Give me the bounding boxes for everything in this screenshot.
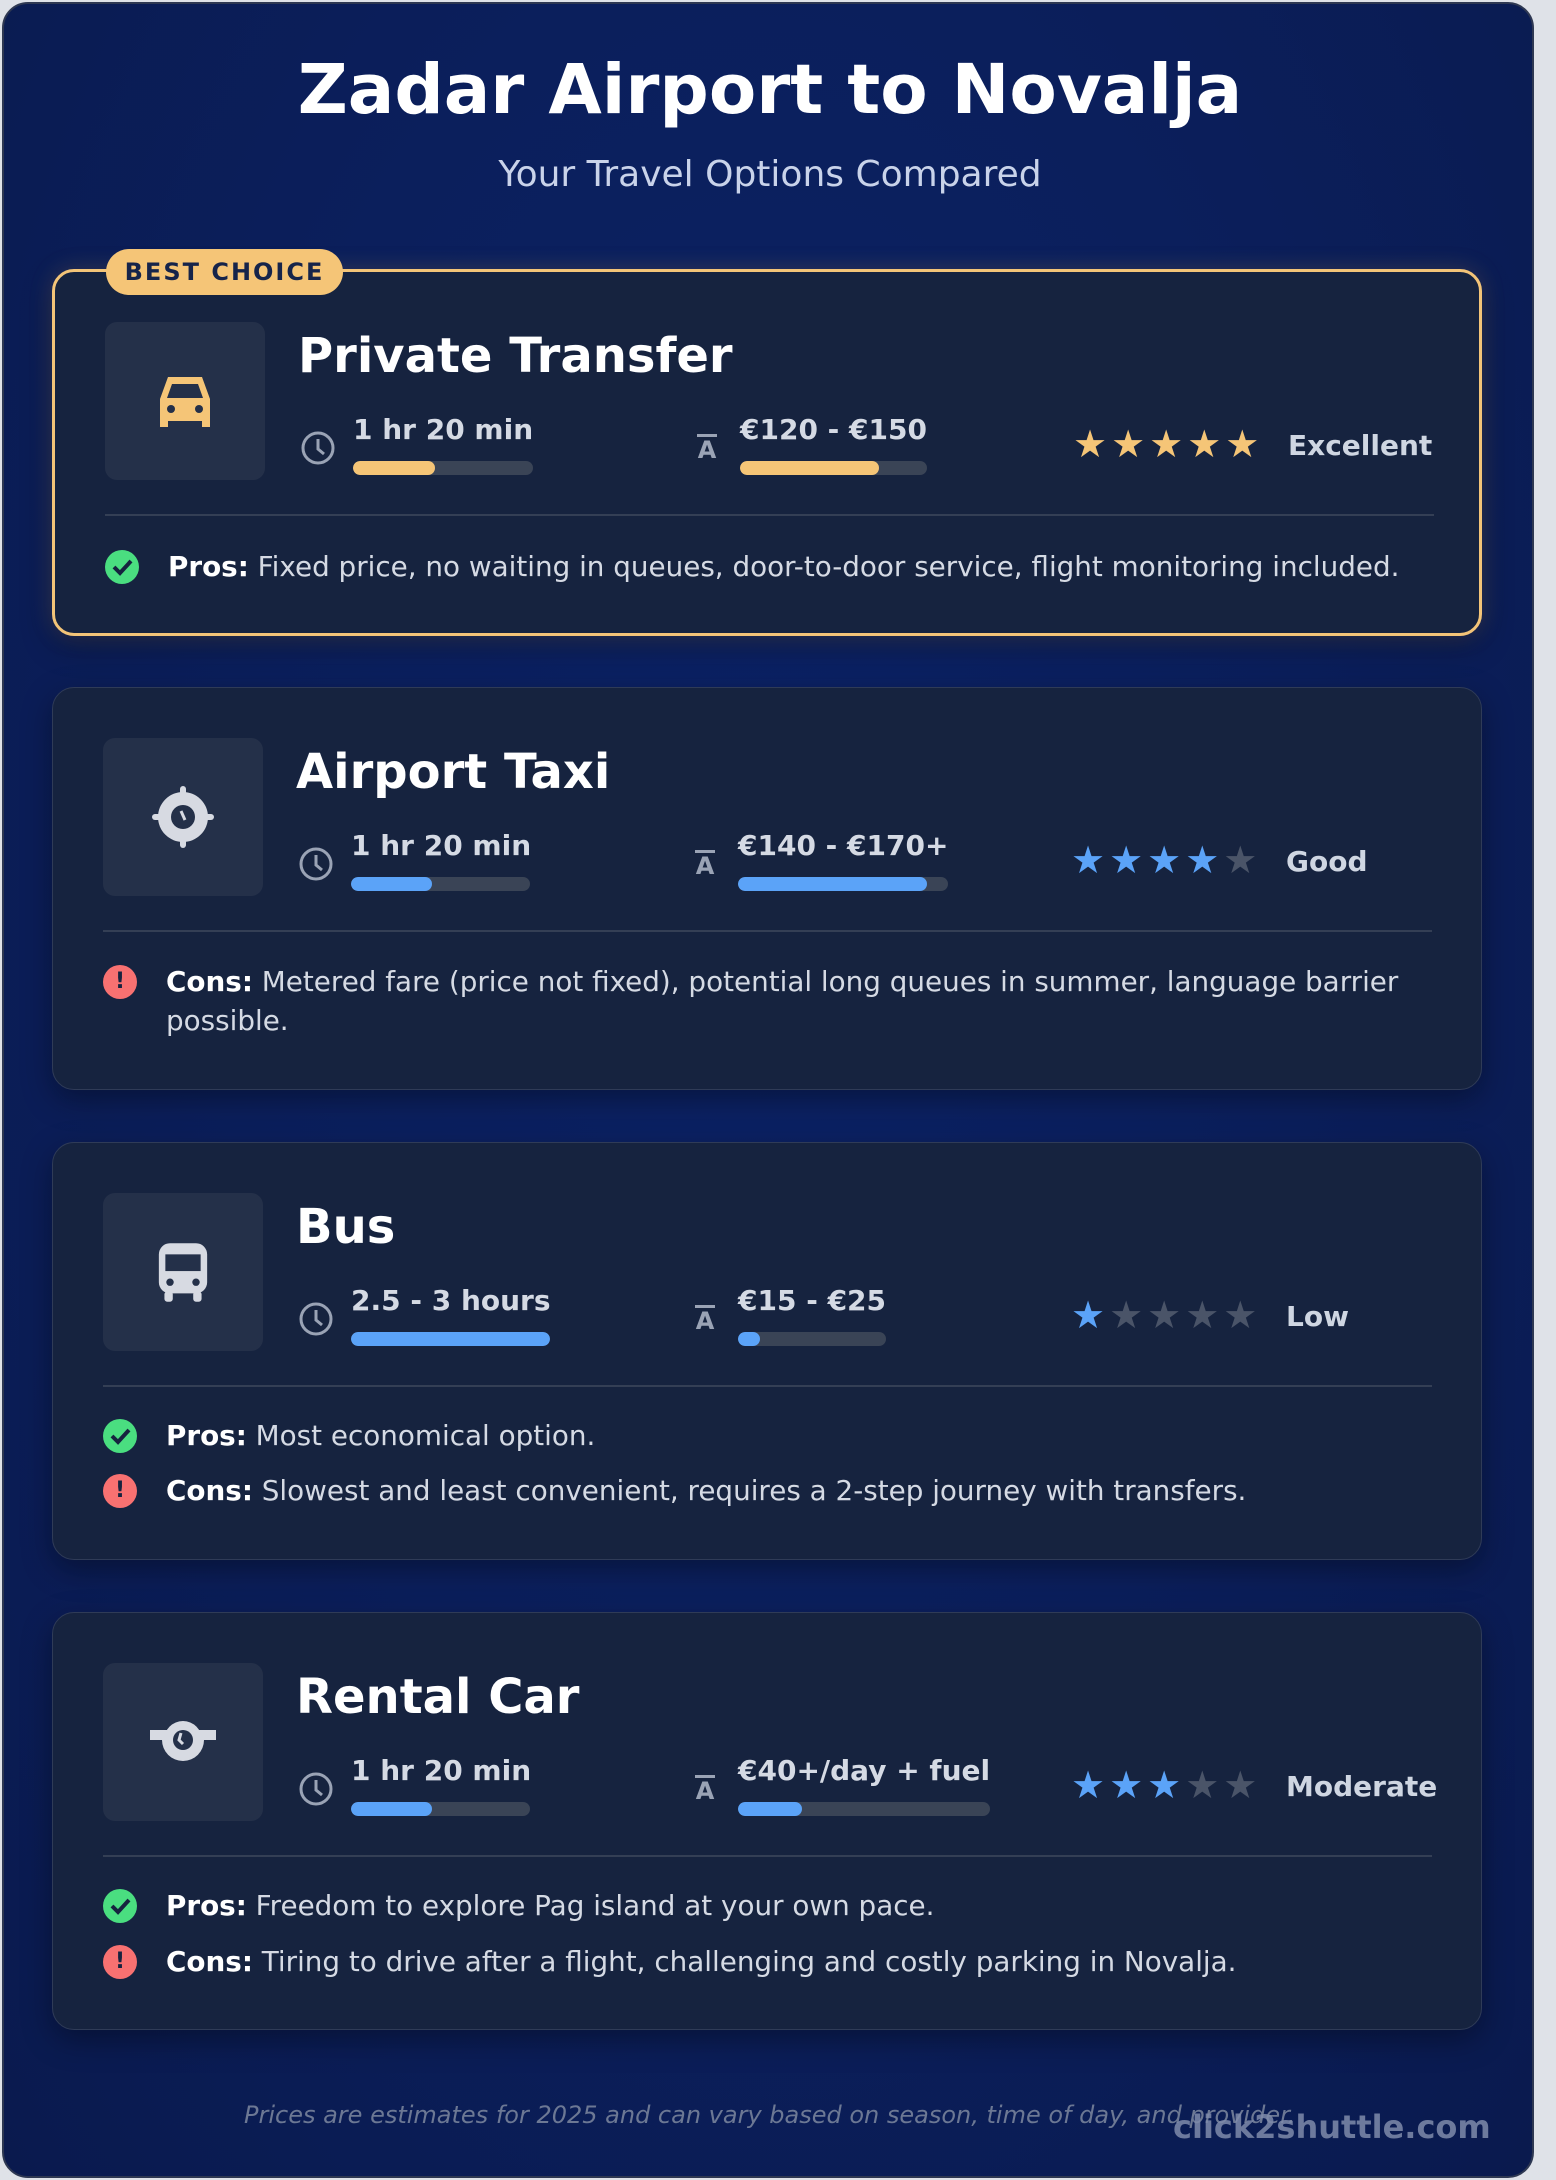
footer note: Prices are estimates for 2025 and can vary based on season, time of day, and provider. <box>244 2101 1295 2129</box>
icon: clock <box>300 1772 332 1806</box>
price: €120 - €150 <box>740 413 927 446</box>
rating label: Excellent <box>1288 429 1432 462</box>
time: 1 hr 20 min <box>353 413 533 446</box>
badge: best choice <box>106 249 343 295</box>
rating stars: ★★★★★ <box>1071 1293 1261 1337</box>
price bar <box>738 1802 990 1816</box>
cons: ! <box>115 1478 125 1503</box>
rating label: Good <box>1286 845 1368 878</box>
icon: taxi <box>103 738 263 896</box>
icon: clock <box>300 1302 332 1336</box>
time: 1 hr 20 min <box>351 829 531 862</box>
heading: Airport Taxi <box>296 744 610 800</box>
panel: airport taxi <box>52 687 1482 1090</box>
price bar <box>738 1332 886 1346</box>
title: Zadar Airport to Novalja <box>298 50 1242 130</box>
icon: rental car <box>103 1663 263 1821</box>
cons: Cons: Tiring to drive after a flight, challenging and costly parking in Novalja. <box>166 1945 1237 1978</box>
cons: Cons: Metered fare (price not fixed), potential long queues in summer, language barrier possible. <box>166 965 1398 1037</box>
subtitle: Your Travel Options Compared <box>498 154 1042 195</box>
rating label: Moderate <box>1286 1770 1437 1803</box>
time bar <box>351 877 530 891</box>
rating stars: ★★★★★ <box>1073 422 1263 466</box>
heading: Rental Car <box>296 1669 579 1725</box>
watermark: click2shuttle.com <box>1173 2108 1491 2146</box>
pros: Pros: Freedom to explore Pag island at your own pace. <box>166 1889 934 1922</box>
icon: bus <box>103 1193 263 1351</box>
price bar <box>740 461 927 475</box>
panel: private transfer <box>52 269 1482 636</box>
time: 2.5 - 3 hours <box>351 1284 551 1317</box>
price bar <box>738 877 948 891</box>
heading: Private Transfer <box>298 328 733 384</box>
pros: Pros: Fixed price, no waiting in queues, door-to-door service, flight monitoring included. <box>168 550 1399 583</box>
icon: car <box>105 322 265 480</box>
price: €40+/day + fuel <box>738 1754 990 1787</box>
icon: clock <box>302 432 334 464</box>
pros: Pros: Most economical option. <box>166 1419 595 1452</box>
price: €15 - €25 <box>738 1284 886 1317</box>
cons: Cons: Slowest and least convenient, requires a 2-step journey with transfers. <box>166 1474 1246 1507</box>
time bar <box>351 1802 530 1816</box>
icon: price: A <box>696 852 714 880</box>
icon: clock <box>300 848 332 880</box>
badge: best choice: BEST CHOICE <box>125 258 324 286</box>
panel: bus <box>52 1142 1482 1560</box>
icon: price: A <box>698 436 716 464</box>
icon: price: A <box>696 1777 714 1805</box>
panel: rental car <box>52 1612 1482 2030</box>
time bar <box>351 1332 550 1346</box>
time: 1 hr 20 min <box>351 1754 531 1787</box>
icon: price: A <box>696 1307 714 1335</box>
rating label: Low <box>1286 1300 1349 1333</box>
cons: ! <box>115 969 125 994</box>
rating stars: ★★★★★ <box>1071 838 1261 882</box>
cons: ! <box>115 1949 125 1974</box>
price: €140 - €170+ <box>738 829 948 862</box>
time bar <box>353 461 533 475</box>
rating stars: ★★★★★ <box>1071 1763 1261 1807</box>
heading: Bus <box>296 1199 395 1255</box>
